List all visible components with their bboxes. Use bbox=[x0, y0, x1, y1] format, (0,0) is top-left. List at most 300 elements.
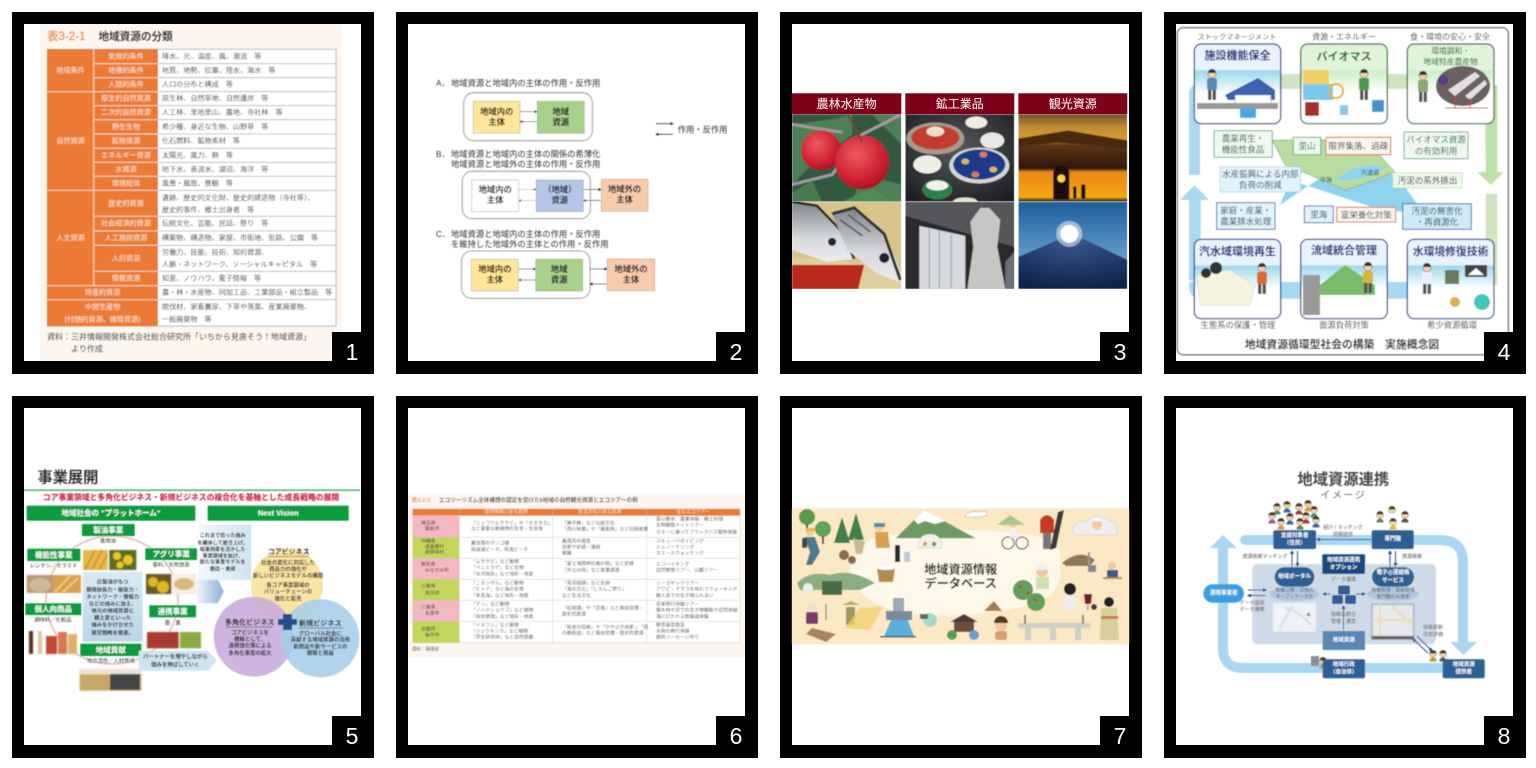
source note: 資料：三井情報開発株式会社総合研究所「いちから見直そう！地域資源」 bbox=[47, 332, 311, 342]
next vision chevron: これまで培った強み bbox=[200, 532, 246, 539]
ecotourism table: 自然環境に係る資源 bbox=[484, 508, 528, 515]
top labels: ストックマネージメント bbox=[1198, 32, 1276, 42]
label boxes bbox=[1214, 131, 1471, 229]
center data panel bbox=[1252, 564, 1436, 644]
classification table: 太陽光、風力、熱 等 bbox=[162, 150, 233, 159]
business boxes: 食用油 bbox=[100, 537, 116, 545]
classification table: 伝統文化、芸能、民話、祭り 等 bbox=[162, 219, 268, 228]
business boxes: アグリ事業 bbox=[153, 549, 190, 559]
diagram caption: 地域資源循環型社会の構築 実施概念図 bbox=[1245, 337, 1439, 351]
classification table: 知恵、ノウハウ、電子情報 等 bbox=[162, 274, 261, 282]
connector labels: 情報の統合 bbox=[1331, 611, 1356, 618]
classification table: (付随的資源、循環資源) bbox=[65, 314, 140, 323]
next vision chevron: 相乗効果を活かした bbox=[200, 546, 246, 553]
tile number 3: 3 bbox=[1114, 339, 1126, 365]
label: agricultural revival: 農業再生・ bbox=[1222, 134, 1264, 144]
node: collaboration option: 地域資源連携 bbox=[1327, 556, 1361, 564]
card: environment-friendly specialty products: 地域特産農産物 bbox=[1423, 56, 1478, 66]
cloud labels: 情報管理・更新管理 bbox=[1371, 586, 1415, 594]
illustration: temple and girl bbox=[920, 601, 1008, 640]
classification table: 労働力、技能、技術、知的資源、 bbox=[162, 248, 268, 257]
illustration: hiker and mushrooms bbox=[802, 522, 890, 565]
database title: データベース bbox=[924, 575, 997, 590]
ecotourism table: 歴史的資源 bbox=[562, 610, 586, 618]
classification table: 情報資源 bbox=[112, 274, 140, 282]
label: wastewater treatment: 農業排水処理 bbox=[1220, 216, 1272, 226]
label: wastewater treatment: 家庭・産業・ bbox=[1220, 206, 1271, 216]
illustration: sake, tub and shrine bbox=[797, 545, 910, 595]
diagram B: 主体 bbox=[616, 194, 634, 204]
ecotourism table: 「多島海」など地形・地質 bbox=[471, 592, 529, 599]
tile number 6 bbox=[716, 716, 757, 757]
ecotourism table: アワビ・テマコを味わうウォーキング bbox=[656, 586, 738, 592]
label: biomass use: バイオマス資源 bbox=[1406, 134, 1466, 144]
ecotourism table bbox=[413, 508, 740, 643]
diagram A: 資源 bbox=[552, 117, 570, 127]
node: local government: （自治体） bbox=[1330, 668, 1358, 676]
ecotourism table: 座間味村 bbox=[425, 548, 444, 556]
connector labels: 紹介 / マッチング bbox=[1323, 524, 1363, 531]
classification table: 遺跡、歴史的文化財、歴史的建造物（寺社等）、 bbox=[162, 193, 315, 202]
classification table: 地下水、表流水、湖沼、海洋 等 bbox=[162, 164, 268, 173]
diagram title bbox=[1297, 470, 1389, 502]
node: regional portal bbox=[1275, 567, 1314, 587]
node: support recipients: 支援対象者 bbox=[1281, 531, 1309, 539]
bottom labels: 希少資源循環 bbox=[1427, 320, 1477, 330]
table heading: 表3-2-1 bbox=[47, 30, 85, 43]
node: professionals bbox=[1372, 530, 1414, 549]
venn: new business: グローバル社会に bbox=[299, 629, 342, 637]
ecotourism table: シュノーケリング bbox=[656, 544, 695, 550]
diagram A bbox=[436, 78, 600, 141]
tile 1: regional resources classification table bbox=[12, 12, 374, 374]
business boxes: 香料／天然資源 bbox=[152, 561, 190, 569]
diagram C bbox=[436, 229, 655, 298]
ecotourism table: スキューバダイビング bbox=[656, 538, 704, 544]
illustration: apple trees and wine bbox=[1013, 564, 1097, 611]
ecotourism table: 「ベニヒカゲ」など生物 bbox=[471, 564, 524, 571]
ecotourism table: 渡嘉敷村 bbox=[425, 543, 444, 550]
product photos bbox=[27, 550, 201, 691]
classification table: 人脈・ネットワーク、ソーシャルキャピタル 等 bbox=[162, 260, 317, 269]
label: marginal villages bbox=[1326, 137, 1391, 155]
label: fisheries load reduction: 負荷の削減 bbox=[1239, 180, 1282, 190]
photo: apples bbox=[792, 114, 902, 202]
ecotourism table: みなかみ町 bbox=[425, 566, 449, 574]
diagram A: 地域 bbox=[552, 106, 570, 116]
table heading bbox=[412, 496, 638, 504]
tile 4: resource-circulating society concept diagram bbox=[1164, 12, 1526, 374]
label: agricultural revival: 機能性食品 bbox=[1222, 144, 1264, 154]
tile 5: business development strategy bbox=[12, 396, 374, 758]
connector labels: データ連携 bbox=[1239, 606, 1265, 613]
card: brackish water restoration: 汽水域環境再生 bbox=[1199, 244, 1276, 258]
center strengths text panel: 郷土愛といった bbox=[94, 614, 131, 622]
column: tourism resources: 観光資源 bbox=[1049, 97, 1097, 111]
tile number 8: 8 bbox=[1498, 723, 1510, 749]
diagram B: B． bbox=[436, 149, 450, 159]
classification table: 二次的自然資源 bbox=[101, 108, 151, 117]
venn: diversified business bbox=[214, 597, 294, 677]
card: biomass: バイオマス bbox=[1316, 50, 1372, 63]
center strengths text panel: 経営戦略を推進。 bbox=[92, 628, 134, 636]
ecotourism table: 名張市 bbox=[425, 610, 440, 616]
diagram B: 資源 bbox=[551, 195, 569, 205]
connector labels: 資源検索マッチング bbox=[1242, 553, 1288, 560]
next vision chevron: 創造・育成 bbox=[210, 565, 235, 572]
ecotourism table: エコハイキング bbox=[656, 560, 690, 568]
bottom labels: 面源負荷対策 bbox=[1319, 320, 1370, 330]
illustration: bridge and kimono woman bbox=[1018, 597, 1119, 640]
ecotourism table: 自然散策ツアー、山麓ツアー bbox=[656, 566, 718, 574]
arrow legend bbox=[656, 124, 727, 135]
central map of land and water: 宍道湖 bbox=[1361, 169, 1379, 177]
card: facility function preservation bbox=[1194, 44, 1281, 124]
node: collaboration option bbox=[1322, 554, 1365, 574]
label: marginal villages: 限界集落、過疎 bbox=[1329, 141, 1389, 151]
ecotourism table: 「鳥羽城跡」など史跡 bbox=[562, 580, 610, 586]
diagram A: 地域資源と地域内の主体の作用・反作用 bbox=[451, 78, 600, 88]
tile number 4 bbox=[1484, 332, 1525, 373]
classification table: 構築物、構造物、家屋、市街地、街路、公園 等 bbox=[162, 233, 318, 242]
ecotourism table: 飯能市 bbox=[425, 525, 440, 532]
diagram B: 主体 bbox=[487, 195, 504, 205]
connector labels: 活用評価 bbox=[1423, 631, 1443, 638]
center strengths text panel: 強みをかけ合せた bbox=[92, 621, 134, 629]
venn: diversified business: 機軸として、 bbox=[234, 635, 266, 643]
ecotourism table: 三重県 bbox=[421, 582, 436, 590]
card: environment-friendly specialty products: 環境調和・ bbox=[1431, 46, 1470, 56]
diagram B: 地域内の bbox=[479, 184, 512, 194]
central map of land and water: 中海 bbox=[1320, 176, 1332, 184]
photo: paper dress bbox=[905, 202, 1014, 289]
ecotourism table: 闇木林や沢での生き物観察や自然体験 bbox=[656, 606, 738, 614]
label: satoyama: 里山 bbox=[1298, 141, 1316, 151]
node: partner business: 連携事業者 bbox=[1210, 588, 1238, 596]
classification table: 気候的条件 bbox=[108, 52, 144, 60]
classification table: 鉱物資源 bbox=[112, 136, 140, 145]
ecotourism table: 阿波連ビーチ、阿真ビーチ bbox=[471, 546, 528, 553]
diagram B: 地域資源と地域外の主体の作用・反作用 bbox=[451, 159, 600, 169]
tile number 5: 5 bbox=[346, 723, 358, 749]
business boxes: 地方活性／人材育成 bbox=[87, 657, 135, 665]
tile 6: ecotourism table bbox=[396, 396, 758, 758]
business boxes: 地域貢献 bbox=[96, 644, 126, 654]
database title bbox=[924, 561, 997, 590]
ecotourism table: 「ヒトデ」など海の生物 bbox=[471, 586, 524, 592]
next vision chevron bbox=[197, 524, 251, 603]
section headers: Next Vision bbox=[258, 509, 299, 518]
venn: core business: コアビジネス bbox=[268, 547, 309, 556]
diagram A: A． bbox=[436, 78, 450, 88]
classification table: 人的資源 bbox=[112, 254, 140, 262]
business boxes: 農 業 bbox=[165, 618, 181, 626]
label: agricultural revival bbox=[1214, 131, 1272, 157]
connector arrows bbox=[1248, 540, 1432, 653]
venn: new business bbox=[281, 599, 359, 677]
classification table: 原生的自然資源 bbox=[101, 94, 151, 103]
strategy subtitle: コア事業領域と多角化ビジネス・新規ビジネスの複合化を基軸とした成長戦略の展開 bbox=[43, 492, 339, 502]
diagram A: 地域内の bbox=[480, 106, 513, 116]
ecotourism table: 鳥羽市 bbox=[425, 590, 440, 596]
ecotourism table: 忍者修行体験ツアー bbox=[656, 600, 699, 608]
ecotourism table: 慶良間のサンゴ礁 bbox=[471, 540, 510, 546]
ecotourism table: 埼玉県 bbox=[421, 520, 436, 526]
classification table: 地質、地勢、位置、陸水、海水 等 bbox=[162, 66, 276, 75]
classification table: 人工林、里地里山、農地、寺社林 等 bbox=[162, 108, 283, 117]
classification table: 特産的資源 bbox=[85, 288, 120, 297]
ecotourism table: 「イヌワシ」など動物 bbox=[471, 622, 519, 628]
label: satoumi: 里海 bbox=[1310, 209, 1328, 219]
classification table: 人口の分布と構成 等 bbox=[162, 80, 233, 89]
classification table: 地域条件 bbox=[56, 66, 85, 75]
venn: diversified business: 多角化事業の拡大 bbox=[228, 649, 272, 657]
label: sludge detoxification bbox=[1403, 204, 1471, 229]
venn: new business: 貢献する地域資源の活用 bbox=[291, 635, 350, 643]
classification table: 風景・風致、景観 等 bbox=[162, 178, 233, 187]
diagram C: 地域内の bbox=[478, 264, 511, 274]
table heading: 表3-2-2 bbox=[412, 496, 430, 504]
table heading bbox=[47, 30, 173, 43]
arrow legend: 作用・反作用 bbox=[678, 125, 727, 135]
ecotourism table: 無人島での生き物ふれあい bbox=[656, 592, 714, 599]
ecotourism table: 里山散歩、農業体験・郷土料理 bbox=[656, 516, 723, 522]
center strengths text panel: 辻製油がもつ bbox=[97, 577, 128, 585]
illustration: hot spring and soba bbox=[1062, 516, 1122, 579]
ecotourism table: 「氷河地形」など地形・地質 bbox=[471, 570, 534, 578]
classification table: 環境総体 bbox=[112, 178, 140, 187]
card: brackish water restoration bbox=[1194, 239, 1281, 319]
connector labels: 情報更新 bbox=[1423, 624, 1443, 631]
top labels bbox=[1198, 32, 1490, 42]
column: agriculture, forestry and fisheries bbox=[792, 93, 901, 289]
diagram title: 地域資源連携 bbox=[1297, 470, 1389, 488]
business boxes: 連携事業 bbox=[158, 606, 188, 616]
column: mining and manufacturing products bbox=[905, 93, 1014, 289]
central map of land and water bbox=[1272, 140, 1425, 215]
classification table: 化石燃料、鉱物素材 等 bbox=[162, 136, 240, 145]
illustration: dam bbox=[880, 598, 916, 638]
ecotourism table: 鹿肉ソーセージ作り bbox=[656, 634, 699, 640]
database icon bbox=[1332, 586, 1356, 604]
label: biomass use: の有効利用 bbox=[1415, 146, 1457, 156]
center strengths text panel: 開発技術力・販促力・ bbox=[86, 586, 139, 594]
node: regional resources bbox=[1323, 631, 1365, 650]
next vision chevron: 新たな事業モデルを bbox=[200, 559, 246, 566]
classification table: 自然資源 bbox=[56, 136, 85, 145]
classification table bbox=[47, 49, 336, 326]
source note: 資料：環境省 bbox=[412, 646, 439, 652]
tile number 3 bbox=[1100, 332, 1141, 373]
business boxes bbox=[25, 524, 197, 665]
photo: sunset bbox=[1018, 114, 1128, 202]
connector labels: 情報提供 bbox=[1333, 531, 1353, 538]
ecotourism table: など貴重な動植物の生育・生息地 bbox=[471, 525, 543, 532]
diagram C: 地域 bbox=[551, 264, 568, 274]
ecotourism table: 生活文化に係る資源 bbox=[578, 508, 621, 515]
connector labels: 資源検索 bbox=[1402, 553, 1422, 560]
people groups bbox=[1268, 500, 1447, 668]
label: sludge detoxification: ・再資源化 bbox=[1416, 217, 1459, 227]
connector labels: データ連携 bbox=[1331, 576, 1356, 583]
node: resource providers: 提供者 bbox=[1455, 668, 1472, 676]
next vision chevron: 事業領域を拡げ、 bbox=[202, 553, 243, 560]
node: support recipients: （住民） bbox=[1284, 538, 1306, 546]
tile number 7 bbox=[1100, 716, 1141, 757]
venn: core business: 社会の変化に対応した bbox=[261, 558, 315, 566]
venn center cross bbox=[278, 614, 297, 630]
illustration: snowboarder and cyclist bbox=[965, 510, 1064, 550]
tile number 7: 7 bbox=[1114, 723, 1126, 749]
partner chevron: パートナーを増やしながら bbox=[143, 652, 208, 660]
connector labels: データ提供 bbox=[1239, 600, 1265, 606]
column: agriculture, forestry and fisheries: 農林水産物 bbox=[817, 97, 877, 111]
card: biomass bbox=[1301, 44, 1387, 124]
ecotourism table: シーカヤックツアー bbox=[656, 580, 699, 586]
card: environment-friendly specialty products bbox=[1407, 44, 1494, 124]
ecotourism table: ホエールウォッチング bbox=[656, 550, 704, 556]
ecotourism table: 「テン」など動物 bbox=[471, 600, 510, 608]
table heading: 地域資源の分類 bbox=[98, 30, 173, 43]
label: fisheries load reduction: 水産振興による内部 bbox=[1222, 169, 1299, 179]
card: integrated basin management: 流域統合管理 bbox=[1311, 243, 1377, 257]
label: biomass use bbox=[1404, 132, 1468, 159]
diagram C: 地域外の bbox=[614, 264, 648, 274]
node: electronic contact book: サービス bbox=[1382, 576, 1404, 584]
classification table: 原生林、自然草地、自然護岸 等 bbox=[162, 94, 268, 103]
tile number 2: 2 bbox=[730, 339, 742, 365]
venn: diversified business: コアビジネスを bbox=[231, 628, 269, 636]
venn: new business: 新商品や新サービスの bbox=[293, 643, 347, 651]
tile number 1: 1 bbox=[346, 339, 358, 365]
ecotourism table: 「西川林業」や「飯能焼」など伝統産業 bbox=[562, 526, 649, 532]
ecotourism table: 野草薬草教室 bbox=[656, 622, 685, 628]
node: electronic contact book bbox=[1372, 567, 1414, 587]
classification table: 野生生物 bbox=[112, 122, 140, 131]
card: integrated basin management bbox=[1301, 239, 1387, 319]
photo: ceramics bbox=[905, 114, 1014, 202]
diagram C: C． bbox=[436, 229, 450, 239]
node: regional portal: 地域ポータル bbox=[1278, 572, 1311, 580]
illustration: craft and farmer bbox=[806, 601, 883, 642]
node: electronic contact book: 電子@連絡帳 bbox=[1377, 568, 1410, 576]
column: mining and manufacturing products: 鉱工業品 bbox=[936, 97, 984, 111]
venn: new business: 開発と発展 bbox=[307, 649, 334, 657]
cloud labels: 情報公開・可視化 bbox=[1275, 586, 1314, 594]
tile 7: regional resource database illustration bbox=[780, 396, 1142, 758]
ecotourism table: 郷踊 bbox=[562, 550, 572, 556]
map screenshots bbox=[1273, 603, 1414, 639]
source note bbox=[47, 332, 311, 354]
classification table: 歴史的事件、郷土出身者 等 bbox=[162, 205, 254, 214]
classification table: エネルギー資源 bbox=[101, 150, 151, 159]
label: sludge detoxification: 汚泥の無害化 bbox=[1411, 206, 1463, 216]
node: support recipients bbox=[1273, 530, 1316, 549]
classification table: 降水、光、温度、風、潮流 等 bbox=[162, 52, 261, 60]
venn: diversified business: 連携強化策による bbox=[229, 642, 271, 650]
cloud labels: オープンデータ化 bbox=[1275, 593, 1314, 600]
next vision chevron: を継承して磨き上げ、 bbox=[197, 539, 248, 546]
venn: diversified business: 多角化ビジネス bbox=[225, 618, 275, 627]
ecotourism table: 集落内の個音 bbox=[562, 538, 591, 544]
center strengths text panel: 地元の地域資源と bbox=[92, 607, 134, 615]
ecotourism table: 「井土分校」など産業資源 bbox=[562, 566, 620, 574]
diagram C: 資源 bbox=[551, 274, 568, 284]
cloud labels: 専門職のみ検索 bbox=[1376, 593, 1410, 600]
ecotourism table: の鵜街道」など風俗習慣・歴史的資源 bbox=[562, 630, 644, 636]
partner chevron bbox=[139, 651, 217, 671]
venn: new business: 新規ビジネス bbox=[299, 618, 342, 627]
platform ring bbox=[46, 536, 178, 664]
ecotourism table: 「芦生研究林」など自然景観 bbox=[471, 634, 534, 640]
ecotourism table: 「富士浅間神社奥の院」など史跡 bbox=[562, 560, 634, 567]
ecotourism table: 三重県 bbox=[421, 604, 436, 610]
diagram A: 主体 bbox=[488, 117, 506, 127]
banner background bbox=[792, 508, 1129, 644]
tile number 6: 6 bbox=[730, 723, 742, 749]
center strengths text panel: ネットワーク・情報力 bbox=[86, 592, 139, 600]
venn: core business: 強化と拡充 bbox=[275, 594, 302, 602]
classification table: 人工施設資源 bbox=[105, 233, 147, 242]
ecotourism table: など生活文化 bbox=[562, 592, 591, 599]
section headers bbox=[27, 506, 349, 521]
label: fisheries load reduction bbox=[1220, 167, 1301, 192]
classification table: 社会経済的資源 bbox=[101, 219, 151, 228]
label: sludge discharge: 汚泥の系外排出 bbox=[1398, 176, 1457, 186]
label: eutrophication measures: 富栄養化対策 bbox=[1341, 210, 1392, 220]
diagram C: 地域資源と地域内の主体の作用・反作用 bbox=[451, 229, 600, 239]
node: collaboration option: オプション bbox=[1330, 564, 1358, 571]
label: eutrophication measures bbox=[1337, 207, 1396, 222]
classification table: 歴史的資源 bbox=[108, 198, 144, 207]
ecotourism table: カヌーに乗ってブラックバス駆除体験 bbox=[656, 528, 737, 536]
venn: core business: 各コア事業領域の bbox=[266, 581, 310, 589]
ecotourism table: 民家や史跡・遺跡 bbox=[562, 544, 601, 550]
node: professionals: 専門職 bbox=[1384, 535, 1401, 543]
diagram B bbox=[436, 149, 648, 219]
card: facility function preservation: 施設機能保全 bbox=[1204, 48, 1270, 62]
tile number 2 bbox=[716, 332, 757, 373]
business boxes: 製油事業 bbox=[93, 524, 124, 534]
ecotourism table: 滝に打たれる修験道体験 bbox=[656, 613, 709, 620]
table heading: エコツーリズム全体構想の認定を受けた6地域の自然観光資源とエコツアーの例 bbox=[439, 496, 638, 504]
tile 3: photo panel of local products bbox=[780, 12, 1142, 374]
bottom labels bbox=[1201, 320, 1477, 330]
label: satoumi bbox=[1304, 206, 1333, 223]
classification table: 農・林・水産物、同加工品、工業部品・組立製品 等 bbox=[162, 288, 332, 297]
node: partner business bbox=[1203, 584, 1244, 603]
label: sludge discharge bbox=[1393, 173, 1462, 188]
label: wastewater treatment bbox=[1217, 203, 1275, 229]
column: tourism resources bbox=[1018, 93, 1127, 289]
ecotourism table: 主なエコツアー bbox=[676, 508, 710, 515]
classification table: 人間的条件 bbox=[108, 80, 144, 89]
connector labels bbox=[1239, 524, 1443, 638]
classification table: 水資源 bbox=[115, 164, 137, 173]
tile number 5 bbox=[332, 716, 373, 757]
ecotourism table: 「海女文化」「しろんご祭り」 bbox=[562, 586, 627, 592]
diagram C: 主体 bbox=[486, 274, 504, 284]
label: satoyama bbox=[1293, 137, 1321, 155]
photo: bonito fish bbox=[792, 202, 902, 289]
node: resource providers: 地域資源 bbox=[1453, 660, 1475, 668]
ecotourism table: 京都府 bbox=[421, 626, 436, 632]
venn: core business: 新しいビジネスモデルの構築 bbox=[253, 572, 324, 580]
ecotourism table: 沖縄県 bbox=[421, 538, 436, 544]
tile number 4: 4 bbox=[1498, 339, 1511, 365]
classification table: 中間生産物 bbox=[85, 302, 120, 311]
venn: core business: 商品力の強化や bbox=[269, 565, 307, 573]
